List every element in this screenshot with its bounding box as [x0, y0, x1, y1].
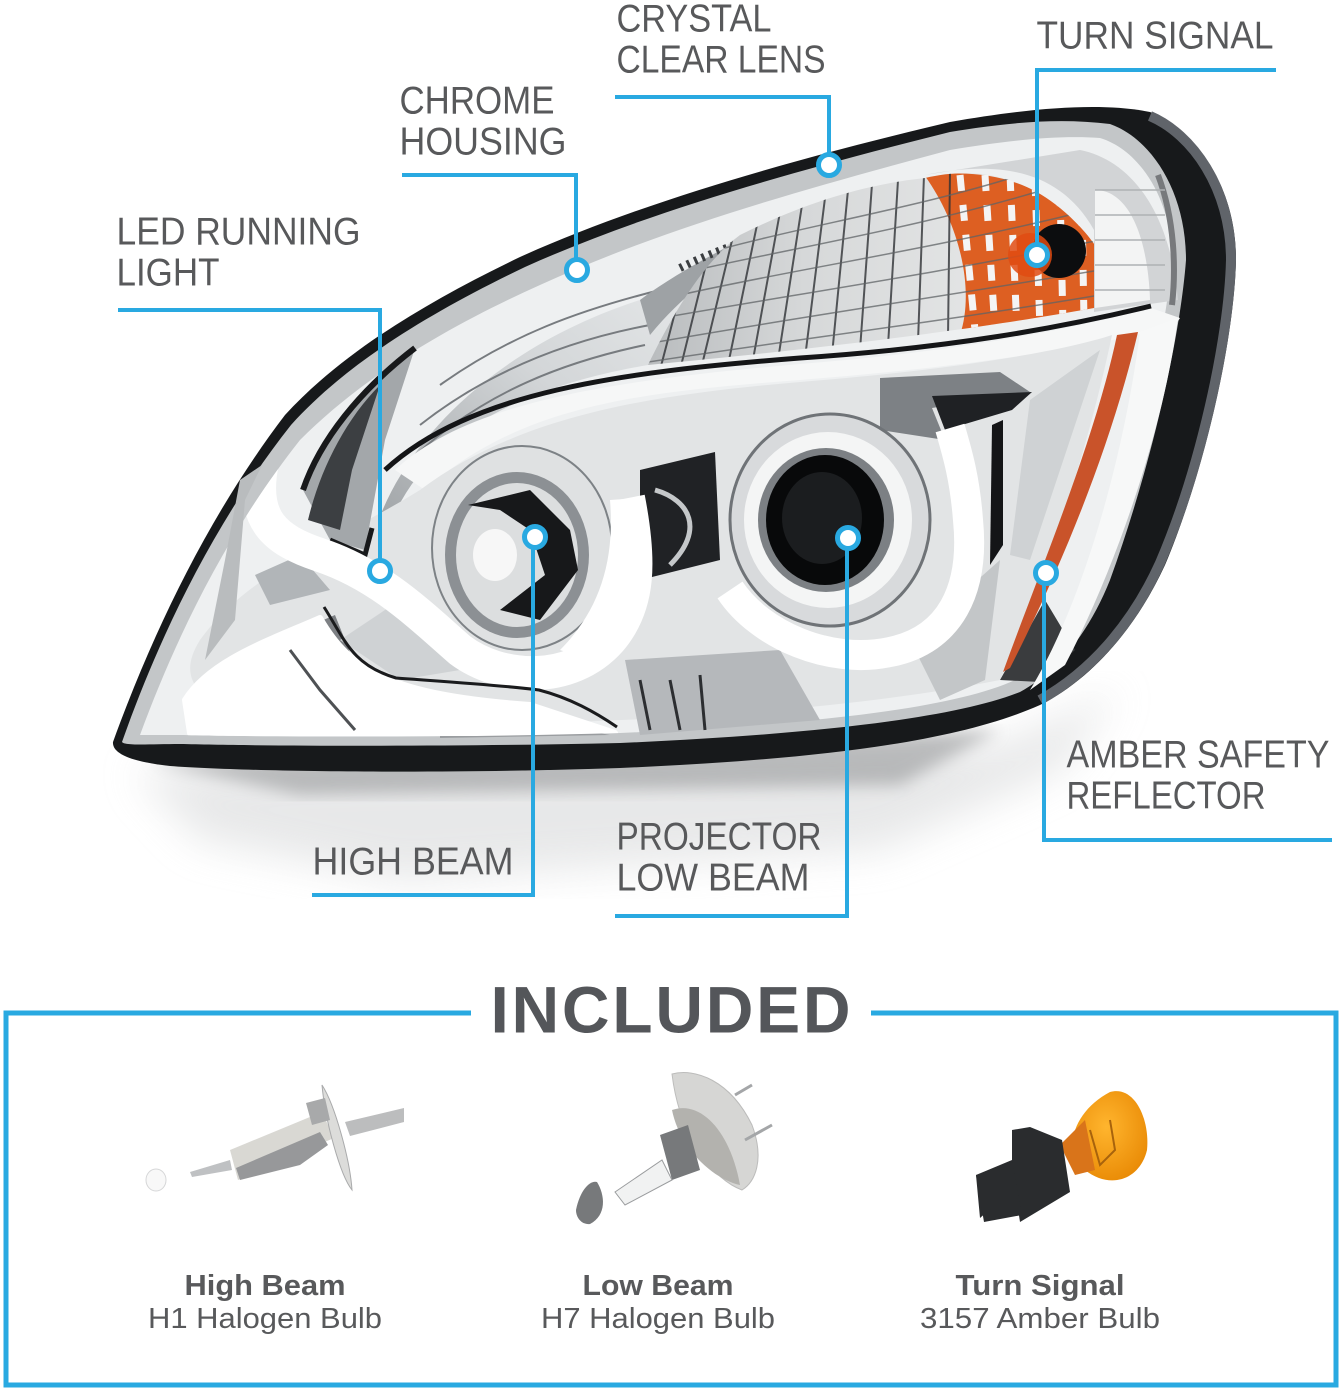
label: LED running light: LIGHT: [116, 252, 220, 294]
icon: H7 halogen bulb: [576, 1073, 772, 1224]
callout: amber safety reflector: [1044, 573, 1332, 840]
callout: turn signal: [1037, 70, 1276, 255]
heading: included: INCLUDED: [490, 972, 850, 1046]
callout lines: [118, 70, 1332, 916]
amber lens zone: [925, 173, 1100, 335]
label: projector low beam: LOW BEAM: [616, 856, 810, 900]
label: chrome housing: CHROME: [400, 80, 554, 122]
callout: chrome housing: [402, 175, 576, 270]
item: low beam: H7 Halogen Bulb: [541, 1303, 775, 1335]
panel: included: [6, 972, 1336, 1385]
label: LED running light: [116, 210, 360, 294]
headlight assembly: [113, 107, 1236, 880]
label: crystal clear lens: [616, 0, 826, 82]
callout dots: [370, 154, 1056, 584]
label: high beam: HIGH BEAM: [312, 840, 514, 884]
LED light strips: [185, 428, 969, 733]
item: turn signal: Turn Signal: [956, 1270, 1124, 1302]
label: LED running light: LED RUNNING: [116, 210, 360, 254]
side chrome strip: [1030, 318, 1178, 690]
label: amber safety reflector: REFLECTOR: [1066, 774, 1266, 818]
interior chrome: [140, 137, 1172, 737]
label: crystal clear lens: CLEAR LENS: [616, 38, 826, 82]
callout: crystal clear lens: [615, 97, 829, 165]
item: turn signal: [920, 1270, 1160, 1335]
callout: projector low beam: [615, 538, 847, 916]
upper chrome arc: [372, 235, 740, 540]
item: high beam: High Beam: [184, 1270, 346, 1302]
label: projector low beam: PROJECTOR: [616, 816, 822, 858]
panel frame: [6, 1013, 1336, 1385]
callout: LED running light: [118, 310, 380, 571]
label: chrome housing: HOUSING: [400, 120, 566, 164]
label: amber safety reflector: [1066, 734, 1330, 818]
label: chrome housing: [400, 80, 566, 164]
icon: 3157 amber bulb: [976, 1091, 1147, 1222]
item: low beam: Low Beam: [582, 1270, 734, 1302]
lower projector bay: [190, 335, 1112, 725]
item: low beam: [541, 1270, 775, 1335]
left chrome reflections: [205, 465, 262, 660]
item: turn signal: 3157 Amber Bulb: [920, 1303, 1160, 1335]
ground shadow: [135, 690, 1120, 880]
label: turn signal: TURN SIGNAL: [1036, 14, 1274, 58]
low-beam projector: [730, 414, 930, 626]
side amber reflector: [1003, 332, 1138, 672]
turn-signal bulb socket: [1032, 224, 1086, 278]
callout: high beam: [312, 537, 533, 895]
dividing chrome band: [395, 308, 1180, 490]
clear turn-signal lens: [640, 150, 1178, 370]
label: projector low beam: [616, 816, 822, 900]
item: high beam: [148, 1270, 382, 1335]
lens grid: [660, 172, 950, 370]
black housing: [113, 107, 1236, 772]
left bracket vent: [303, 348, 415, 555]
grey outer edge of housing: [1040, 116, 1231, 700]
icon: H1 halogen bulb: [146, 1085, 404, 1191]
item: high beam: H1 Halogen Bulb: [148, 1303, 382, 1335]
high-beam projector: [432, 446, 612, 650]
hatched chrome rim: [122, 121, 1186, 746]
lower dark contour: [324, 607, 617, 727]
high-beam LED arc: [560, 498, 643, 660]
